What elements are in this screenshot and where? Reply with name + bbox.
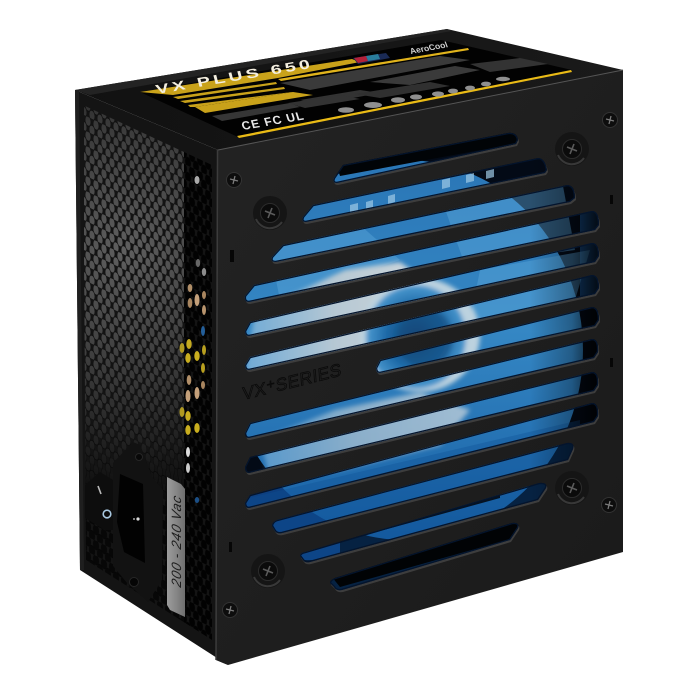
specification text blocks	[212, 56, 548, 121]
rocker switch	[98, 486, 101, 494]
power socket	[113, 442, 163, 602]
voltage label: 200 - 240 Vac	[169, 493, 184, 590]
slot rim highlights	[246, 135, 600, 592]
switch indicator ring	[103, 510, 111, 518]
internal components seen through holes	[180, 176, 206, 503]
certification marks: CE FC UL	[240, 109, 306, 133]
fan hub	[360, 278, 480, 392]
white fan blades	[245, 262, 470, 480]
slot edge lines	[245, 133, 599, 590]
large fan screws	[251, 132, 589, 588]
embossed series logo: VX⁺SERIES	[242, 359, 342, 404]
lower shading	[285, 420, 580, 590]
upper yellow line	[278, 48, 469, 81]
perforation holes	[84, 100, 214, 660]
panel: front face	[216, 70, 623, 665]
lighter blade facets	[272, 186, 590, 318]
power supply illustration	[75, 29, 624, 665]
title band	[140, 59, 360, 95]
product name: VX PLUS 650	[154, 56, 315, 97]
brand logo: AeroCool	[408, 40, 449, 56]
small panel marks	[229, 195, 613, 552]
yellow stripes	[173, 82, 313, 113]
panel: top face	[75, 29, 623, 150]
voltage label	[167, 477, 185, 617]
sticker: specification label	[140, 40, 572, 138]
power switch plate	[85, 472, 113, 530]
small corner screws	[222, 112, 618, 618]
rating badge	[353, 53, 390, 64]
bottom vent shadow	[334, 523, 518, 587]
fan seen through vents	[244, 132, 599, 590]
lower yellow line	[237, 70, 572, 138]
right-hand shadow	[536, 187, 599, 466]
top vent shadow	[339, 134, 518, 176]
fan blade disc	[227, 160, 583, 540]
compliance icons	[338, 77, 510, 113]
blade notches	[350, 169, 494, 214]
fan frame corners	[245, 470, 340, 560]
panel: side face	[75, 90, 228, 665]
